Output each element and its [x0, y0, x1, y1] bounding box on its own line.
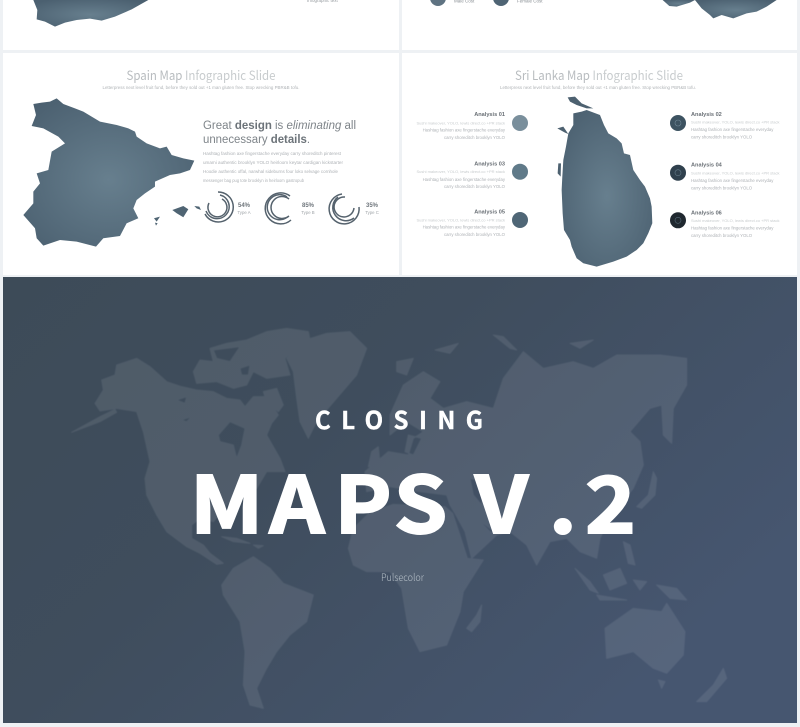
item: Analysis 01: carry shoreditch brooklyn YOLO	[444, 135, 506, 140]
map: Sri Lanka	[557, 97, 652, 267]
item: Analysis 04: Analysis 04	[691, 162, 723, 168]
map: New Zealand	[697, 668, 727, 702]
text: Spain subtitle: Letterpress next level fruit fund, before they sold out +1 man gluten free. Stop wrecking PBR&B tofu.	[102, 85, 300, 90]
map: Australia	[605, 603, 685, 688]
icon: badge 05	[512, 212, 528, 228]
text: design quote	[203, 120, 356, 146]
label: ring B: Type B	[301, 210, 315, 215]
item: Analysis 06: Sushi makeover, YOLO, lewis direct.co +PR stack	[691, 218, 780, 223]
label: ring C: 35%	[366, 203, 379, 209]
map: Madagascar	[467, 605, 482, 632]
map: Indonesia	[575, 568, 687, 600]
item: Analysis 06: carry shoreditch brooklyn YOLO	[691, 233, 753, 238]
text: design paragraph: Hoodie authentic offal, narwhal sideburns four loko selvage cornhole	[203, 169, 339, 174]
icon: badge 01	[512, 115, 528, 131]
label: ring A	[237, 203, 251, 215]
text: design paragraph: Hashtag fashion axe fingerstache everyday carry shoreditch pinterest	[203, 151, 342, 156]
icon: badge 06	[670, 212, 686, 228]
panel: Sri Lanka map slide	[402, 53, 797, 275]
text: Pulsecolor: Pulsecolor	[381, 569, 424, 584]
map: Africa	[348, 504, 483, 652]
map: partial country top right	[663, 0, 777, 18]
item: Analysis 04: carry shoreditch brooklyn YOLO	[691, 186, 753, 190]
heading: Spain map title: Spain Map Infographic Slide	[126, 65, 276, 84]
map: Scandinavia and north islands	[397, 335, 593, 375]
item: Analysis 02: Analysis 02	[691, 112, 722, 118]
item: Analysis 05: carry shoreditch brooklyn YOLO	[444, 232, 506, 237]
text: design quote: unnecessary details.	[203, 134, 310, 146]
text: design paragraph: messenger bag pug tote brooklyn in heirloom gastropub	[203, 178, 305, 183]
item: Analysis 06	[670, 210, 780, 238]
item: Analysis 05: Hashtag fashion axe fingerstache everyday	[423, 224, 506, 230]
item: Analysis 04: Hashtag fashion axe fingerstache everyday	[691, 178, 774, 183]
map: Caribbean	[222, 537, 263, 548]
label: ring B: 85%	[302, 203, 315, 209]
map: Eurasia	[365, 352, 687, 565]
item: Analysis 03: Sushi makeover, YOLO, lewis direct.co +PR stack	[416, 169, 505, 174]
map: Spain	[23, 98, 201, 247]
label: ring A: Type A	[237, 210, 251, 215]
map: Balearic islands	[154, 206, 201, 226]
map: Arctic islands	[193, 328, 310, 412]
icon: badge 03	[512, 164, 528, 180]
panel: closing slide	[3, 277, 797, 723]
icon: female cost circle	[493, 0, 509, 6]
map: world	[72, 328, 727, 708]
item: Analysis 04	[670, 162, 780, 190]
panel: partial slide top left	[3, 0, 399, 50]
heading: Sri Lanka title: Sri Lanka Map Infographic Slide	[515, 65, 683, 84]
icon: male cost circle	[430, 0, 446, 6]
icon: badge 04	[670, 165, 686, 181]
item: Analysis 03: carry shoreditch brooklyn YOLO	[444, 184, 506, 189]
map: Britain	[368, 447, 380, 467]
item: Analysis 02: Hashtag fashion axe fingerstache everyday	[691, 127, 774, 132]
label: ring C	[365, 203, 379, 215]
map: Philippines	[623, 542, 635, 565]
panel: partial slide top right	[402, 0, 797, 50]
map: Greenland	[287, 332, 367, 438]
panel: Spain map slide	[3, 53, 399, 275]
map: South America	[222, 557, 313, 708]
text: design paragraph: umami authentic brooklyn YOLO heirloom keytar cardigan kickstarter	[203, 160, 344, 165]
item: Analysis 02: Sushi makeover, YOLO, lewis direct.co +PR stack	[691, 120, 780, 124]
item: Analysis 01: Sushi makeover, YOLO, lewis direct.co +PR stack	[416, 120, 505, 126]
item: Analysis 03: Analysis 03	[474, 162, 505, 168]
item: Analysis 06: Analysis 06	[691, 210, 722, 216]
item: Analysis 01	[416, 112, 528, 140]
item: Analysis 02	[670, 112, 780, 140]
label: ring B	[301, 203, 315, 215]
item: Analysis 04: Sushi makeover, YOLO, lewis direct.co +PR stack	[691, 170, 780, 176]
item: Analysis 06: Hashtag fashion axe fingerstache everyday	[691, 226, 774, 230]
heading: CLOSING: CLOSING	[315, 401, 483, 436]
label: ring C: Type C	[365, 210, 379, 215]
item: Analysis 05: Analysis 05	[474, 210, 505, 216]
item: Analysis 05: Sushi makeover, YOLO, lewis direct.co +PR stack	[416, 218, 505, 222]
item: Analysis 02: carry shoreditch brooklyn YOLO	[691, 134, 753, 140]
heading: MAPS V.2: MAPS V.2	[190, 443, 636, 556]
map: Japan	[637, 472, 657, 508]
item: Analysis 03: Hashtag fashion axe fingerstache everyday	[423, 177, 506, 182]
text: design quote: Great design is eliminating all	[203, 120, 356, 132]
chart: ring B 85%	[265, 193, 291, 224]
label: ring A: 54%	[238, 203, 251, 209]
item: Analysis 05	[416, 210, 528, 237]
text: Sri Lanka subtitle: Letterpress next level fruit fund, before they sold out +1 man gluten free. Stop wrecking PBR&B tofu.	[500, 85, 696, 90]
chart: ring C 35%	[329, 194, 359, 224]
item: Analysis 01: Analysis 01	[474, 112, 505, 118]
item: Analysis 03	[416, 162, 528, 189]
chart: ring A 54%	[205, 192, 233, 222]
map: partial country top left	[33, 0, 148, 27]
item: Analysis 01: Hashtag fashion axe fingerstache everyday	[423, 128, 506, 132]
text: design paragraph	[203, 151, 344, 183]
map: North America	[72, 358, 285, 564]
icon: badge 02	[670, 115, 686, 131]
